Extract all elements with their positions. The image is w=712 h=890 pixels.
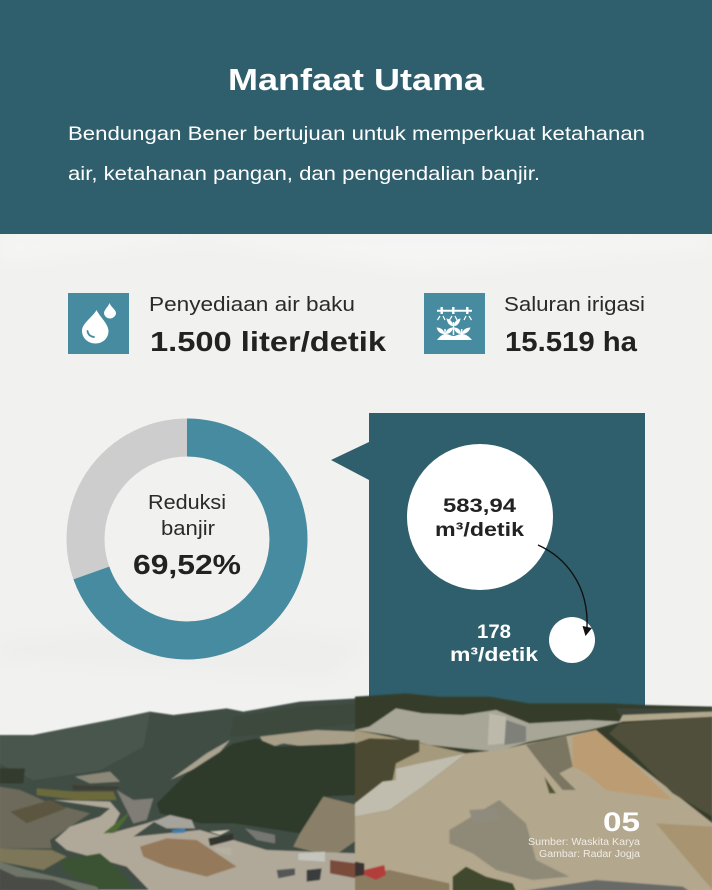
value before: 583,94: [443, 495, 516, 517]
value after: 178: [477, 621, 511, 643]
panel background with pointer: [331, 413, 645, 710]
value before: [435, 495, 524, 541]
label: Saluran irigasi: [504, 294, 645, 316]
icon: irrigation sprinkler and plants: [424, 293, 485, 354]
intro text: [68, 123, 645, 185]
donut center label: [133, 492, 241, 580]
donut center label: 69,52%: [133, 549, 241, 580]
source credit: Gambar: Radar Jogja: [539, 849, 640, 860]
right half of photo: [355, 693, 712, 890]
donut track: [86, 438, 288, 640]
intro text: air, ketahanan pangan, dan pengendalian banjir.: [68, 163, 540, 185]
source credit: Sumber: Waskita Karya: [528, 837, 640, 848]
value: 1.500 liter/detik: [150, 326, 386, 357]
label: Penyediaan air baku: [149, 294, 355, 316]
large circle: [407, 444, 553, 590]
page number: 05: [603, 807, 640, 837]
paper background: [0, 234, 712, 754]
donut center label: Reduksi: [148, 492, 226, 514]
source credit: [528, 837, 640, 860]
donut chart: flood reduction: [86, 438, 288, 640]
icon: water drops: [68, 293, 129, 354]
donut value segment: [86, 438, 288, 640]
small circle: [549, 617, 595, 663]
value before: m³/detik: [435, 519, 524, 541]
left half of photo: [0, 698, 357, 890]
intro text: Bendungan Bener bertujuan untuk memperkuat ketahanan: [68, 123, 645, 145]
value: 15.519 ha: [505, 326, 637, 357]
header band: [0, 0, 712, 234]
title: Manfaat Utama: [228, 62, 485, 97]
photo: dam construction site: [0, 693, 712, 890]
stat: irrigation channels: [424, 293, 645, 357]
arrow: [538, 545, 592, 636]
stat: raw water supply: [68, 293, 386, 357]
callout panel: discharge reduction: [331, 413, 645, 710]
value after: [450, 621, 538, 666]
value after: m³/detik: [450, 644, 538, 666]
donut center label: banjir: [161, 518, 215, 540]
